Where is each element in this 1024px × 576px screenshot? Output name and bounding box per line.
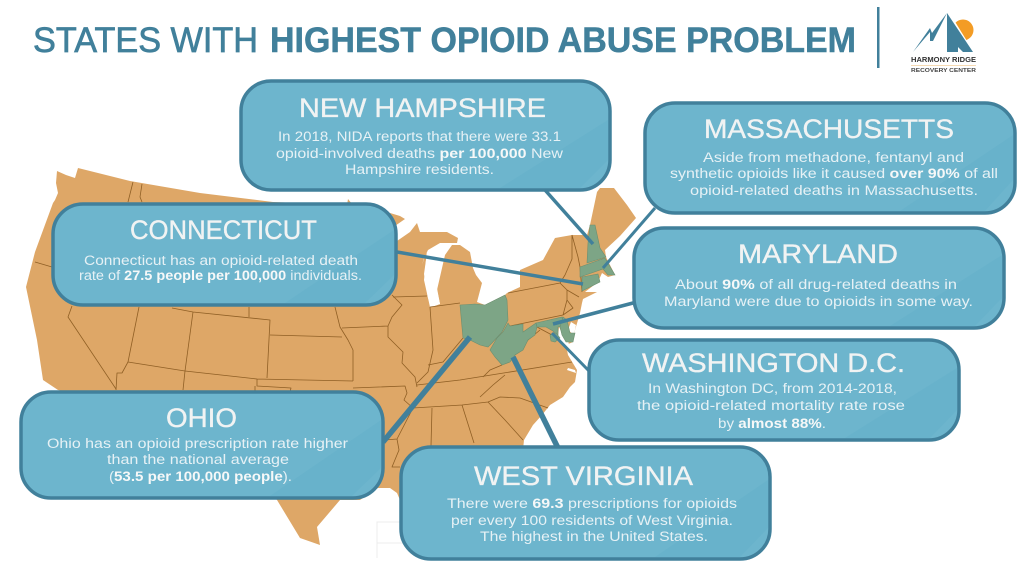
- state: Massachusetts: [580, 258, 615, 277]
- map: land outline: [26, 168, 636, 545]
- state: Ohio: [460, 295, 508, 347]
- panel: Maryland: About 90% of all drug-related deaths in: [675, 277, 957, 292]
- state: Washington D.C. area: [550, 333, 560, 342]
- logo: Harmony Ridge Recovery Center: [877, 7, 976, 74]
- panel: Washington D.C.: by almost 88% .: [718, 416, 826, 431]
- map: state borders: [35, 182, 582, 467]
- inset outlines: [377, 522, 405, 558]
- panel: Connecticut: [53, 204, 396, 305]
- panel: Ohio: than the national average: [107, 452, 289, 467]
- panel: Ohio: Ohio has an opioid prescription rate higher: [47, 436, 349, 451]
- pointer lines: [383, 190, 655, 448]
- panel: Washington D.C.: In Washington DC, from 2014-2018,: [648, 381, 897, 396]
- panel: Ohio: [21, 392, 383, 498]
- panel: Connecticut: Connecticut has an opioid-related death: [84, 253, 358, 268]
- logo: Harmony Ridge Recovery Center: RECOVERY CENTER: [911, 68, 976, 74]
- map: lakes cut-outs: [424, 246, 447, 307]
- panel: Connecticut: rate of 27.5 people per 100,000 individuals.: [79, 268, 362, 283]
- title: HIGHEST OPIOID ABUSE PROBLEM: [270, 21, 856, 60]
- title: [33, 21, 856, 60]
- panel: West Virginia: There were 69.3 prescriptions for opioids: [447, 496, 737, 511]
- panel: Washington D.C.: the opioid-related mortality rate rose: [637, 398, 905, 413]
- state: New Hampshire: [587, 225, 606, 263]
- title: STATES WITH: [33, 21, 258, 60]
- panel: New Hampshire: opioid-involved deaths per 100,000 New: [276, 146, 563, 161]
- panel: New Hampshire: Hampshire residents.: [345, 162, 494, 177]
- map of the United States: [26, 168, 636, 545]
- panel: Ohio: OHIO: [166, 403, 237, 433]
- panel: Massachusetts: synthetic opioids like it caused over 90% of all: [670, 166, 998, 181]
- panel: Washington D.C.: [589, 340, 959, 440]
- panel: Ohio: (53.5 per 100,000 people ).: [109, 469, 292, 484]
- panel: Massachusetts: [645, 103, 1015, 213]
- panel: Connecticut: CONNECTICUT: [130, 215, 317, 245]
- state: West Virginia: [490, 323, 537, 365]
- logo: Harmony Ridge Recovery Center: HARMONY RIDGE: [911, 55, 976, 64]
- panel: Maryland: [634, 228, 1004, 328]
- panel: Massachusetts: Aside from methadone, fentanyl and: [703, 150, 964, 165]
- panel: Maryland: MARYLAND: [738, 239, 898, 269]
- panel: Massachusetts: opioid-related deaths in Massachusetts.: [690, 183, 978, 198]
- panel: Massachusetts: MASSACHUSETTS: [704, 114, 954, 144]
- panel: West Virginia: [401, 447, 770, 559]
- panel: Washington D.C.: WASHINGTON D.C.: [642, 348, 905, 378]
- state: Maryland: [536, 317, 564, 336]
- state: Maryland eastern shore: [560, 317, 575, 342]
- panel: West Virginia: per every 100 residents of West Virginia.: [451, 513, 733, 528]
- panel: New Hampshire: NEW HAMPSHIRE: [299, 93, 546, 123]
- panel: West Virginia: The highest in the United States.: [480, 529, 708, 544]
- panel: West Virginia: WEST VIRGINIA: [474, 461, 693, 491]
- state: Connecticut: [582, 274, 600, 291]
- panel: New Hampshire: In 2018, NIDA reports that there were 33.1: [278, 129, 561, 144]
- panel: New Hampshire: [241, 81, 610, 190]
- highlighted states: [460, 225, 615, 365]
- panel: Maryland: Maryland were due to opioids in some way.: [664, 294, 973, 309]
